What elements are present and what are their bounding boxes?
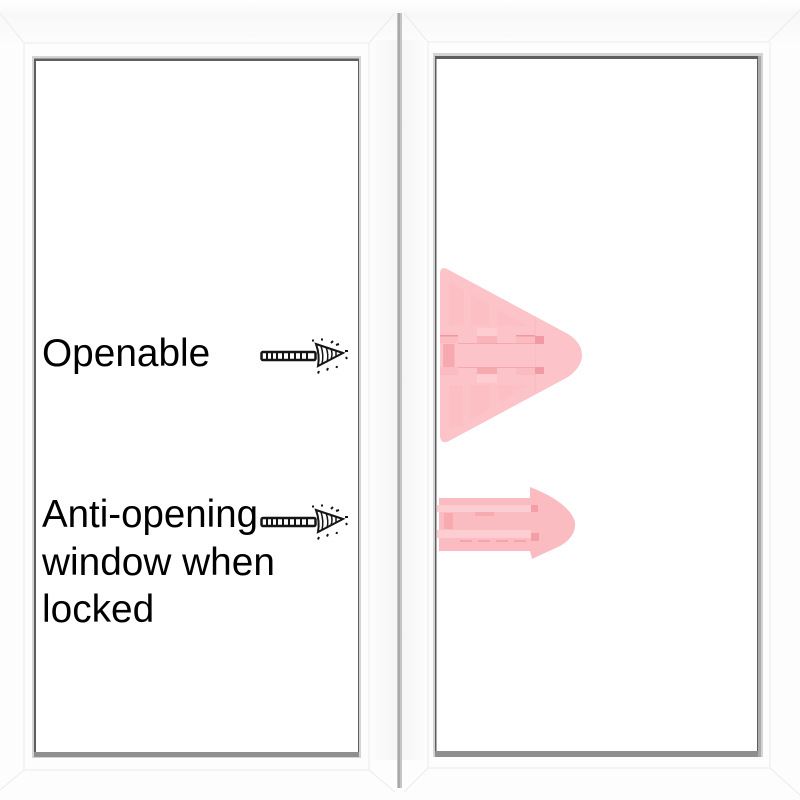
pink lock: open position	[440, 268, 582, 442]
label: Openable: Openable	[42, 332, 210, 375]
label: Anti-opening window when locked	[41, 493, 275, 631]
arrow: anti-opening	[262, 504, 348, 540]
lock details	[440, 282, 544, 430]
left window pane	[32, 56, 361, 758]
arrow: openable	[262, 338, 348, 374]
pink lock: locked position	[437, 487, 575, 559]
label: Anti-opening window when locked: window when	[41, 541, 275, 584]
label: Anti-opening window when locked: locked	[42, 588, 154, 631]
right window pane	[433, 53, 763, 757]
label: Anti-opening window when locked: Anti-opening	[42, 493, 258, 536]
centre gap	[397, 13, 402, 788]
lock rails	[437, 505, 539, 541]
